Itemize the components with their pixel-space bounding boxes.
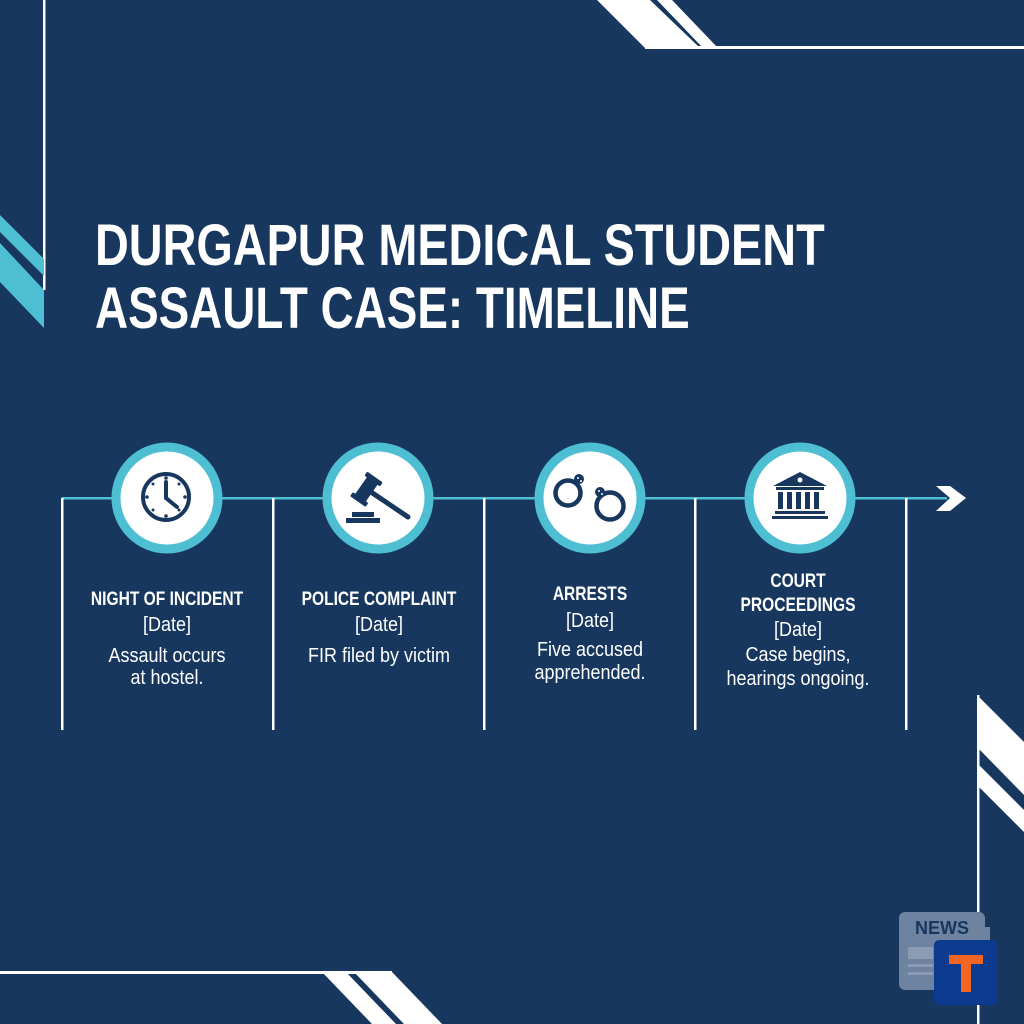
- step 4 text: hearings ongoing.: [726, 668, 870, 690]
- step 3 text: Five accused: [537, 639, 643, 661]
- step 1 text: [91, 588, 243, 689]
- timeline axis: [61, 486, 966, 730]
- icon: courthouse: [749, 447, 851, 549]
- decoration: left stripes: [0, 0, 46, 328]
- icon: handcuffs: [539, 447, 641, 549]
- decoration: top-right stripes: [597, 0, 1024, 49]
- step 1 text: NIGHT OF INCIDENT: [91, 588, 243, 609]
- step 4 text: Case begins,: [745, 644, 851, 666]
- step 1 text: Assault occurs: [109, 645, 225, 667]
- icon: gavel: [327, 447, 429, 549]
- step 4 text: [Date]: [774, 619, 822, 641]
- step 2 text: [Date]: [355, 614, 403, 636]
- step 4 text: COURT: [770, 570, 826, 591]
- logo: news T: [899, 912, 998, 1005]
- decoration: bottom stripes: [0, 971, 442, 1024]
- step 3 text: ARRESTS: [553, 583, 627, 604]
- decoration: right stripes: [977, 695, 1024, 1024]
- step 1 text: [Date]: [143, 614, 191, 636]
- step 3 text: apprehended.: [534, 662, 646, 684]
- step 2 text: FIR filed by victim: [308, 645, 450, 667]
- title: [95, 213, 825, 341]
- logo: news T: NEWS: [915, 918, 969, 938]
- step 3 text: [534, 583, 646, 684]
- step 2 text: POLICE COMPLAINT: [302, 588, 457, 609]
- step 4 text: PROCEEDINGS: [740, 594, 856, 615]
- step 3 text: [Date]: [566, 610, 614, 632]
- title: DURGAPUR MEDICAL STUDENT: [95, 213, 825, 278]
- step 1 text: at hostel.: [130, 667, 204, 689]
- step 4 text: [726, 570, 870, 690]
- icon: clock: [116, 447, 218, 549]
- step 2 text: [302, 588, 457, 667]
- title: ASSAULT CASE: TIMELINE: [95, 277, 690, 341]
